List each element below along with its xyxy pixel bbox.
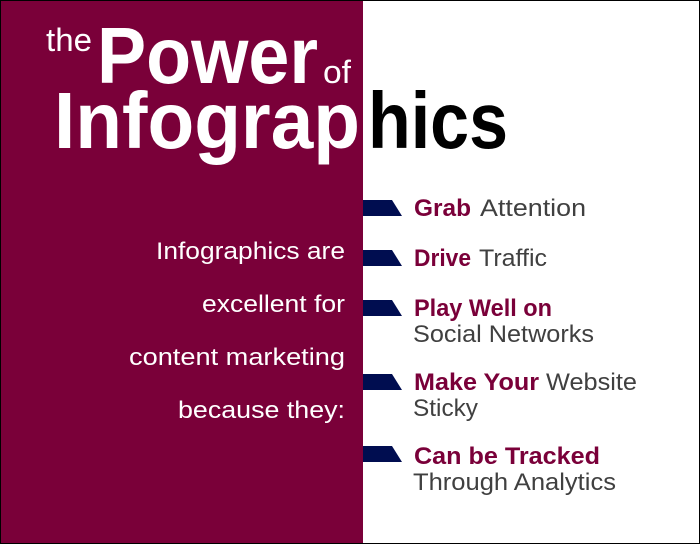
title: Infograp — [54, 76, 360, 165]
icon: navy tab marker — [363, 446, 402, 462]
list item: Play Well on Social Networks: Social Networks — [413, 321, 594, 348]
list item: Can be Tracked Through Analytics — [363, 443, 616, 496]
list item: Grab Attention: Grab — [414, 195, 471, 222]
list item: Drive Traffic: Traffic — [479, 245, 547, 272]
title: Power — [97, 11, 318, 100]
intro text block — [129, 238, 345, 424]
title: hics — [368, 76, 508, 165]
icon: navy tab marker — [363, 200, 402, 216]
list item: Drive Traffic: Drive — [414, 245, 471, 272]
list item: Grab Attention: Attention — [480, 195, 586, 222]
list item: Play Well on Social Networks — [363, 295, 594, 348]
intro text block: because they: — [178, 397, 345, 424]
list item: Play Well on Social Networks: Play Well on — [414, 295, 552, 322]
intro text block: content marketing — [129, 344, 345, 371]
icon: navy tab marker — [363, 374, 402, 390]
list item: Can be Tracked Through Analytics: Through Analytics — [413, 469, 616, 496]
intro text block: Infographics are — [156, 238, 345, 265]
title: the — [46, 22, 92, 58]
title — [46, 11, 508, 165]
list item: Drive Traffic — [363, 245, 547, 272]
icon: navy tab marker — [363, 250, 402, 266]
list item: Grab Attention — [363, 195, 586, 222]
panel: maroon left side — [0, 0, 363, 544]
list item: Can be Tracked Through Analytics: Can be Tracked — [414, 443, 600, 470]
list item: Make Your Website Sticky: Website — [546, 369, 637, 396]
title: of — [323, 54, 351, 90]
list item: Make Your Website Sticky: Make Your — [414, 369, 539, 396]
list item: Make Your Website Sticky — [363, 369, 637, 422]
list item: Make Your Website Sticky: Sticky — [413, 395, 478, 422]
icon: navy tab marker — [363, 300, 402, 316]
intro text block: excellent for — [202, 291, 345, 318]
